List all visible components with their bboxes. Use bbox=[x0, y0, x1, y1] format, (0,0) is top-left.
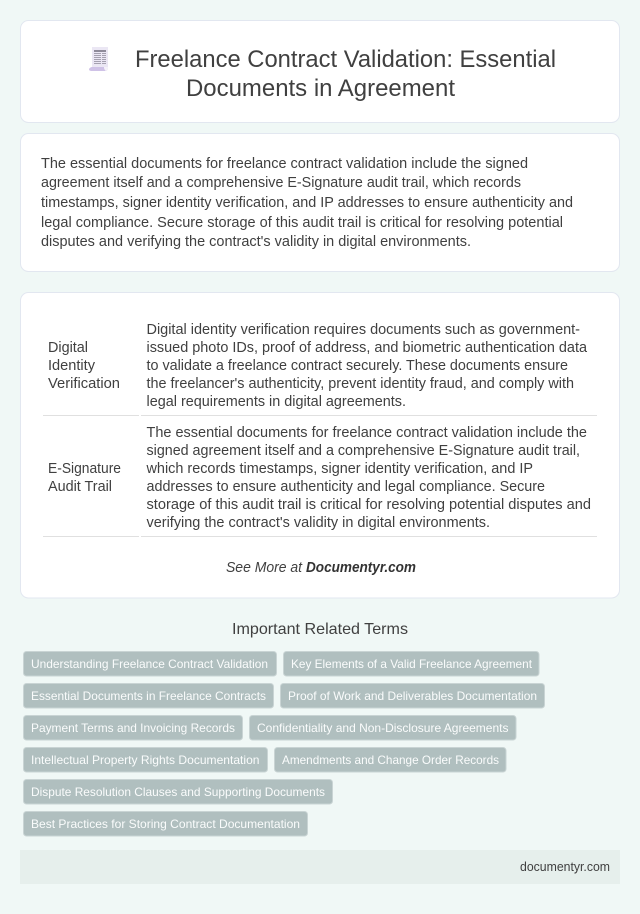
chip bbox=[274, 748, 506, 772]
row description: E-Signature Audit Trail: The essential documents for freelance contract validation include the bbox=[146, 425, 587, 441]
row description: Digital Identity Verification: the freelancer's authenticity, prevent identity fraud, and comply with bbox=[146, 376, 574, 392]
row description: Digital Identity Verification: issued photo IDs, proof of address, and biometric authentication data bbox=[146, 340, 587, 356]
chip bbox=[24, 716, 242, 740]
icon: document scroll bbox=[89, 47, 108, 71]
chip: Payment Terms and Invoicing Records bbox=[31, 721, 235, 735]
see more link bbox=[226, 560, 416, 576]
see more link: See More at bbox=[226, 560, 303, 576]
footer bar: documentyr.com bbox=[520, 859, 610, 874]
chip bbox=[24, 684, 274, 708]
text block: summary: disputes and verifying the contract's validity in digital environments. bbox=[41, 234, 471, 250]
row label: E-Signature Audit Trail: E-Signature bbox=[48, 461, 121, 477]
chip: Understanding Freelance Contract Validation bbox=[31, 657, 268, 671]
row description: E-Signature Audit Trail: addresses to ensure authenticity and legal compliance. Secure bbox=[146, 479, 545, 495]
text block: summary: The essential documents for freelance contract validation include the signed bbox=[41, 156, 528, 172]
panel: documents table bbox=[20, 292, 620, 598]
text block: summary: agreement itself and a comprehensive E-Signature audit trail, which records bbox=[41, 175, 521, 191]
text block: summary: legal compliance. Secure storage of this audit trail is critical for resolving potential bbox=[41, 215, 563, 231]
row description: E-Signature Audit Trail: which records timestamps, signer identity verification, and IP bbox=[145, 461, 533, 477]
row label: Digital Identity Verification: Digital bbox=[48, 340, 88, 356]
row label: Digital Identity Verification: Verification bbox=[48, 376, 120, 392]
chip bbox=[284, 652, 539, 676]
row label: Digital Identity Verification: Identity bbox=[48, 358, 96, 374]
chip: Confidentiality and Non-Disclosure Agreements bbox=[257, 721, 508, 735]
text block: summary bbox=[41, 156, 573, 250]
chip bbox=[24, 652, 276, 676]
panel: summary paragraph bbox=[20, 134, 620, 272]
heading: Important Related Terms: Important Related Terms bbox=[232, 621, 408, 638]
row description: Digital Identity Verification: Digital identity verification requires documents such as government- bbox=[146, 322, 580, 338]
see more link: Documentyr.com bbox=[306, 560, 416, 576]
chip: Intellectual Property Rights Documentation bbox=[31, 753, 260, 767]
table row: E-Signature Audit Trail bbox=[43, 425, 597, 537]
chip bbox=[280, 684, 544, 708]
table row: Digital Identity Verification bbox=[43, 322, 597, 416]
chip bbox=[24, 748, 268, 772]
title bbox=[135, 46, 556, 102]
row description: Digital Identity Verification: to validate a freelance contract securely. These documents ensure bbox=[146, 358, 568, 374]
row description: E-Signature Audit Trail: signed agreement itself and a comprehensive E-Signature audit trail, bbox=[146, 443, 580, 459]
chip: Key Elements of a Valid Freelance Agreement bbox=[291, 657, 533, 671]
row label: Digital Identity Verification bbox=[48, 340, 120, 392]
chip: Dispute Resolution Clauses and Supporting Documents bbox=[31, 785, 325, 799]
text block: summary: timestamps, signer identity verification, and IP addresses to ensure authenticity and bbox=[41, 195, 573, 211]
chip bbox=[250, 716, 516, 740]
chip bbox=[24, 780, 332, 804]
panel: title header bbox=[20, 20, 620, 122]
row description: E-Signature Audit Trail: storage of this audit trail is critical for resolving potential disputes and bbox=[146, 497, 591, 513]
chip bbox=[24, 812, 308, 836]
row description: E-Signature Audit Trail: verifying the contract's validity in digital environments. bbox=[146, 515, 490, 531]
chip: Proof of Work and Deliverables Documentation bbox=[288, 689, 537, 703]
chip: Essential Documents in Freelance Contracts bbox=[31, 689, 266, 703]
row description: Digital Identity Verification bbox=[146, 322, 587, 410]
related terms chips bbox=[24, 652, 544, 836]
title: Freelance Contract Validation: Essential bbox=[135, 46, 556, 73]
row label: E-Signature Audit Trail: Audit Trail bbox=[48, 479, 112, 495]
row description: E-Signature Audit Trail bbox=[145, 425, 591, 531]
footer bar bbox=[20, 850, 620, 884]
row description: Digital Identity Verification: legal requirements in digital agreements. bbox=[146, 394, 406, 410]
chip: Amendments and Change Order Records bbox=[282, 753, 499, 767]
chip: Best Practices for Storing Contract Documentation bbox=[31, 817, 300, 831]
row label: E-Signature Audit Trail bbox=[48, 461, 121, 495]
title: Documents in Agreement bbox=[186, 75, 455, 102]
